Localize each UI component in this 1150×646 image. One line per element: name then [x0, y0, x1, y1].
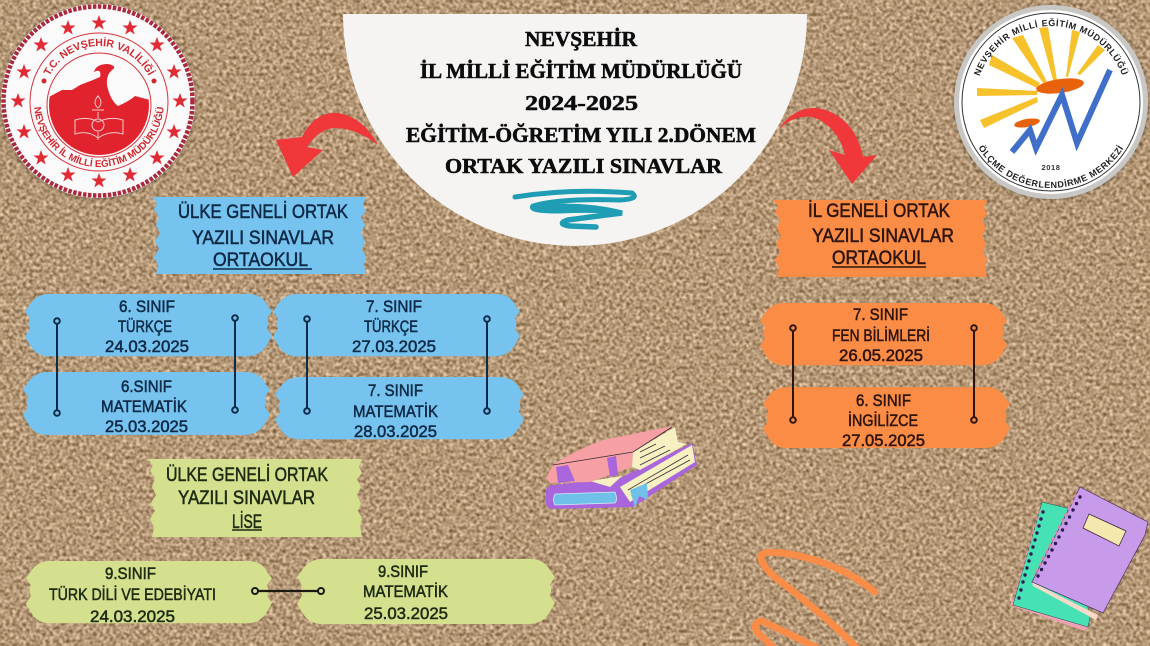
- arrow: left red: [276, 113, 378, 177]
- title text: [406, 27, 756, 178]
- header: ülke geneli ortaokul: [152, 197, 366, 274]
- stars: [10, 15, 188, 188]
- card: 9. sınıf matematik: [297, 559, 555, 624]
- card: 6. sınıf türkçe: 6. SINIF: [119, 297, 175, 316]
- title text: ORTAK YAZILI SINAVLAR: [445, 154, 722, 178]
- card: 7. sınıf türkçe: 27.03.2025: [352, 337, 436, 356]
- card: 9. sınıf türk dili: 9.SINIF: [105, 564, 156, 583]
- header: il geneli ortaokul: ORTAOKUL: [832, 248, 926, 269]
- card: 7. sınıf matematik: 7. SINIF: [368, 381, 423, 400]
- logo: Ölçme Değerlendirme Merkezi: ÖLÇME DEĞERLENDİRME MERKEZİ: [979, 144, 1124, 188]
- card: 6. sınıf ingilizce: İNGİLİZCE: [848, 411, 918, 430]
- card: 9. sınıf matematik: 25.03.2025: [364, 604, 448, 623]
- card: 6. sınıf ingilizce: [763, 387, 1010, 450]
- illustration: notebooks: [1010, 487, 1148, 631]
- upper pink book: [546, 426, 673, 483]
- spiral dots: [1017, 495, 1082, 600]
- connector: green: [252, 588, 324, 594]
- card: 7. sınıf matematik: [275, 377, 524, 441]
- card: 7. sınıf fen bilimleri: 26.05.2025: [839, 346, 923, 365]
- header: ülke geneli lise: [148, 459, 362, 537]
- teal scribble: [515, 191, 634, 227]
- header: ülke geneli lise: ÜLKE GENELİ ORTAK: [166, 465, 328, 486]
- title text: EĞİTİM-ÖĞRETİM YILI 2.DÖNEM: [406, 123, 756, 147]
- card: 9. sınıf matematik: MATEMATİK: [363, 582, 449, 601]
- decorative orange scribble: [755, 552, 875, 646]
- header: il geneli ortaokul: YAZILI SINAVLAR: [812, 226, 954, 247]
- card: 7. sınıf türkçe: TÜRKÇE: [364, 317, 418, 336]
- logo text: NEVŞEHİR MİLLİ EĞİTİM MÜDÜRLÜĞÜ: [974, 18, 1129, 76]
- header: ülke geneli lise: YAZILI SINAVLAR: [178, 488, 315, 509]
- header: il geneli ortaokul: [773, 200, 987, 277]
- header: il geneli ortaokul: İL GENELİ ORTAK: [808, 201, 950, 222]
- card: 6. sınıf matematik: 25.03.2025: [105, 417, 188, 436]
- card: 9. sınıf türk dili: 24.03.2025: [90, 607, 175, 626]
- logo: Ölçme Değerlendirme Merkezi: 2018: [1041, 163, 1061, 172]
- header: ülke geneli ortaokul: YAZILI SINAVLAR: [192, 228, 334, 249]
- card: 7. sınıf fen bilimleri: [760, 303, 1007, 365]
- logo: Nevşehir İl Milli Eğitim Müdürlüğü: [0, 3, 198, 202]
- card: 6. sınıf matematik: [23, 372, 270, 436]
- connectors: ortaokul blue: [54, 315, 490, 416]
- card: 9. sınıf türk dili: TÜRK DİLİ VE EDEBİYATI: [49, 585, 216, 604]
- header: ülke geneli ortaokul: ÜLKE GENELİ ORTAK: [178, 202, 348, 223]
- sun rays: [977, 27, 1105, 128]
- card: 7. sınıf matematik: MATEMATİK: [353, 402, 439, 421]
- card: 7. sınıf türkçe: 7. SINIF: [366, 297, 422, 316]
- card: 6. sınıf türkçe: [25, 294, 272, 356]
- logo: Ölçme Değerlendirme Merkezi: [952, 4, 1150, 202]
- card: 7. sınıf fen bilimleri: 7. SINIF: [853, 305, 908, 324]
- card: 6. sınıf matematik: MATEMATİK: [101, 397, 188, 416]
- title text: 2024-2025: [525, 91, 638, 115]
- logo: Nevşehir İl Milli Eğitim Müdürlüğü: NEVŞEHİR İL MİLLİ EĞİTİM MÜDÜRLÜĞÜ: [34, 106, 164, 168]
- card: 6. sınıf matematik: 6.SINIF: [121, 377, 172, 396]
- title text: NEVŞEHİR: [525, 27, 637, 51]
- illustration: stacked books: [546, 426, 697, 509]
- arrow: right red: [778, 108, 877, 184]
- card: 9. sınıf matematik: 9.SINIF: [378, 562, 428, 581]
- ellipses and rising line: [1035, 76, 1085, 96]
- bookmark: [630, 483, 648, 508]
- spiral rings: [1013, 494, 1076, 600]
- header: ülke geneli lise: LİSE: [232, 512, 262, 533]
- title panel: semicircle: [343, 14, 807, 246]
- card: 9. sınıf türk dili: [26, 561, 272, 626]
- card: 6. sınıf türkçe: TÜRKÇE: [118, 317, 172, 336]
- title text: İL MİLLİ EĞİTİM MÜDÜRLÜĞÜ: [420, 59, 742, 83]
- lower purple book: [546, 443, 697, 509]
- card: 6. sınıf ingilizce: 6. SINIF: [856, 391, 911, 410]
- card: 7. sınıf fen bilimleri: FEN BİLİMLERİ: [832, 326, 930, 345]
- connectors: orange: [790, 325, 977, 423]
- card: 7. sınıf türkçe: [273, 294, 520, 356]
- logo text: T.C. NEVŞEHİR VALİLİĞİ: [43, 37, 156, 76]
- card: 6. sınıf türkçe: 24.03.2025: [105, 337, 189, 356]
- header: ülke geneli ortaokul: ORTAOKUL: [213, 250, 308, 271]
- red landscape and emblem: [47, 64, 150, 160]
- card: 7. sınıf matematik: 28.03.2025: [354, 422, 437, 441]
- card: 6. sınıf ingilizce: 27.05.2025: [842, 431, 925, 450]
- notebook label: [1083, 514, 1126, 546]
